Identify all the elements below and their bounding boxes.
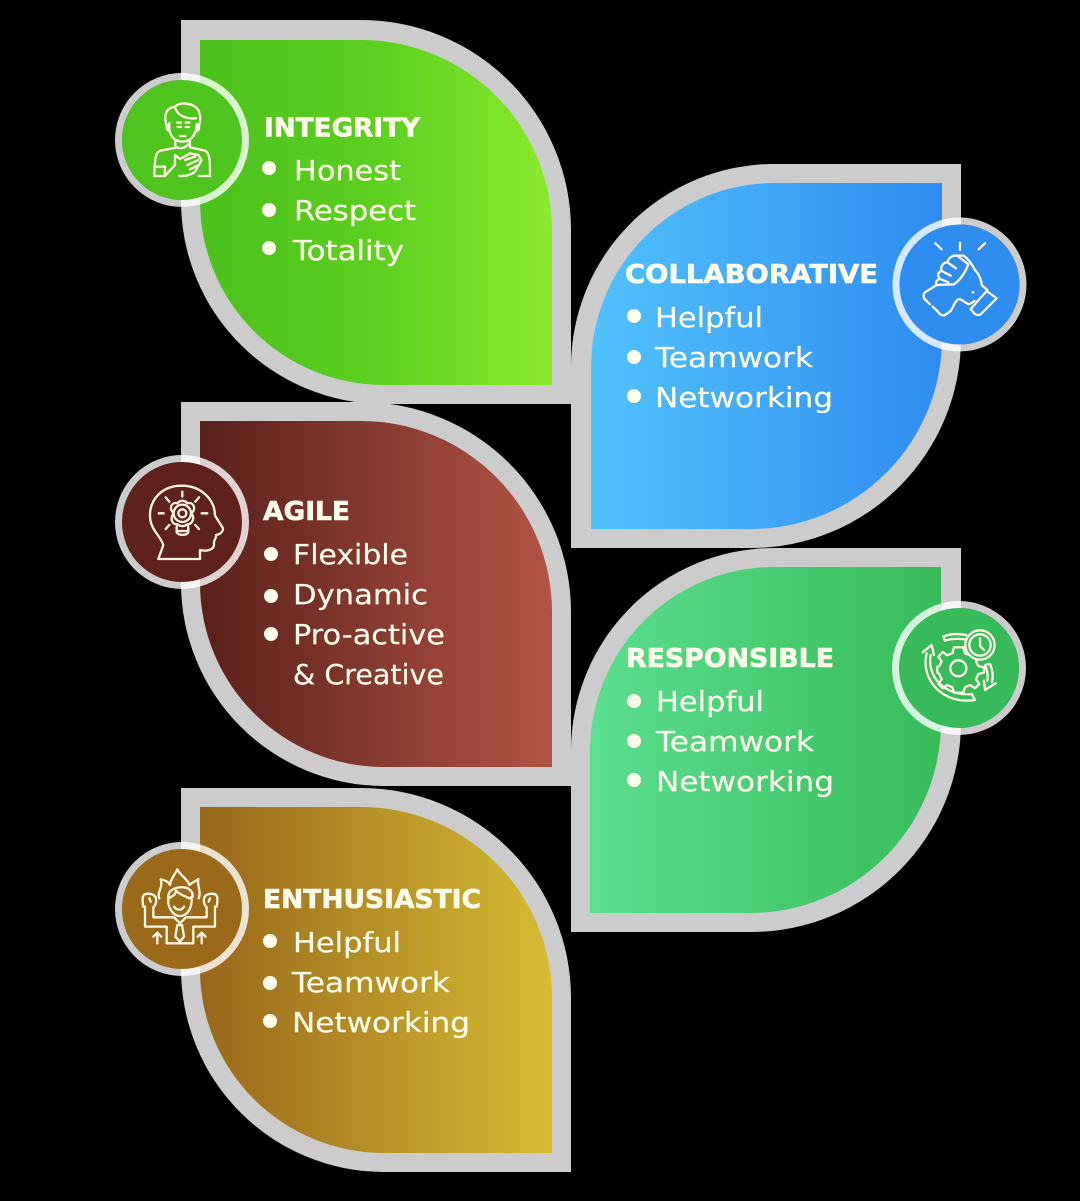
leaf frame: enthusiastic [181,788,571,1172]
panel: responsible [571,548,961,932]
leaf fill: responsible [590,567,941,913]
list: responsible: Networking [656,766,834,798]
badge: responsible [896,604,1022,732]
list: agile: & Creative [293,659,444,691]
leaf frame: collaborative [571,164,961,548]
heading: agile: AGILE [263,497,350,527]
list: agile: Flexible [293,539,408,571]
list: collaborative: Networking [655,382,833,414]
leaf frame: integrity [181,20,571,404]
list: integrity: Totality [292,235,404,267]
panel: integrity [181,20,571,404]
list: responsible [627,686,834,798]
heading: enthusiastic: ENTHUSIASTIC [263,885,481,915]
list: agile: Pro-active [293,619,445,651]
list: integrity [262,155,416,267]
list: integrity: Honest [294,155,401,187]
list: enthusiastic: Helpful [293,927,401,959]
icon: head with gear bulb [150,486,223,559]
list: collaborative: Helpful [655,302,763,334]
badge: integrity [118,76,246,204]
list: collaborative: Teamwork [654,342,813,374]
panel: enthusiastic [181,788,571,1172]
list: enthusiastic [263,927,470,1039]
list: enthusiastic: Networking [292,1007,470,1039]
list: enthusiastic: Teamwork [291,967,450,999]
list: responsible: Helpful [656,686,764,718]
list: collaborative [627,302,833,414]
icon: person with hand on heart [154,104,210,176]
leaf fill: collaborative [591,183,942,529]
list: agile [264,539,445,691]
icon: clasped hands [924,243,997,315]
leaf frame: responsible [571,548,961,932]
heading: responsible: RESPONSIBLE [626,644,834,674]
heading: collaborative: COLLABORATIVE [625,260,878,290]
leaf fill: enthusiastic [200,807,552,1153]
icon: gear with clock and arrows [923,630,996,701]
badge: collaborative [896,221,1023,348]
leaf fill: integrity [200,40,552,385]
panel: collaborative [571,164,961,548]
leaf frame: agile [181,402,571,786]
list: agile: Dynamic [293,579,428,611]
icon: energetic businessman [143,869,217,943]
badge: agile [118,458,246,586]
leaf fill: agile [200,421,552,767]
heading: integrity: INTEGRITY [264,114,421,144]
list: integrity: Respect [294,195,416,227]
panel: agile [181,402,571,786]
list: responsible: Teamwork [655,726,814,758]
badge: enthusiastic [118,846,246,972]
